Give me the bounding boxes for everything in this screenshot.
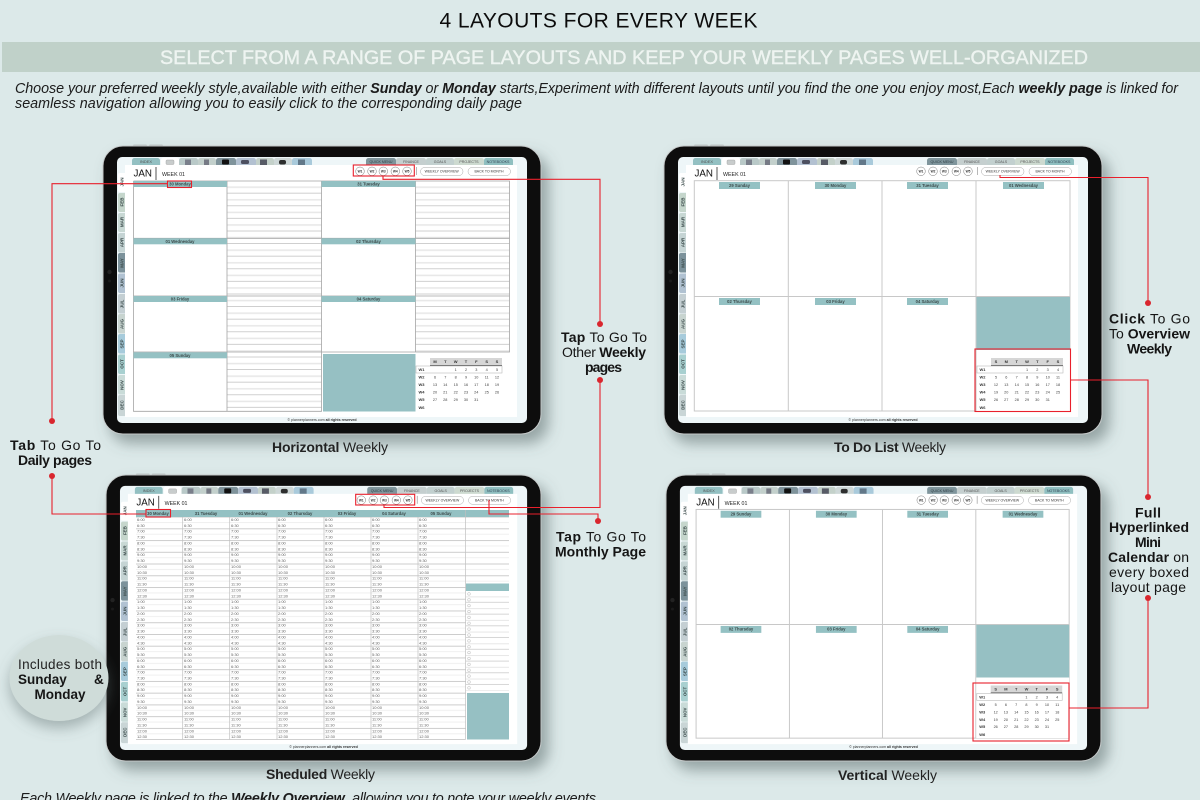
badge: includes both: & <box>94 672 104 687</box>
mini calendar: 4 <box>486 368 488 372</box>
horizontal weekly grid <box>134 181 510 412</box>
arrow: monthly page connector <box>489 500 601 524</box>
horizontal weekly grid: 02 Thursday <box>356 239 382 244</box>
mini calendar: F <box>475 359 478 364</box>
horizontal weekly grid: 04 Saturday <box>357 296 381 302</box>
schedule side column <box>466 510 509 740</box>
tablet: scheduled weekly <box>106 474 541 761</box>
mini calendar: 30 <box>464 398 468 402</box>
arrow: overview weekly connector <box>1000 175 1151 306</box>
mini calendar: 15 <box>454 383 458 387</box>
caption: vertical weekly: Vertical Weekly <box>838 767 937 783</box>
intro paragraph <box>15 81 1179 112</box>
callout: full hyperlinked mini calendar <box>1108 504 1189 595</box>
badge: includes both: Includes both <box>18 657 102 672</box>
badge: includes both: Sunday <box>18 672 67 687</box>
mini calendar: 9 <box>465 376 467 380</box>
mini calendar: 10 <box>474 376 478 380</box>
schedule table: 04 Saturday <box>382 511 407 516</box>
mini calendar: 20 <box>433 390 437 394</box>
callout: tap to go to other weekly pages: Tap To Go To <box>561 329 647 345</box>
caption: to do list weekly: To Do List Weekly <box>834 439 946 455</box>
mini calendar: 28 <box>443 398 447 402</box>
mini calendar: 14 <box>443 383 447 387</box>
callout: tab to go to daily pages <box>10 437 101 468</box>
arrow: daily pages bottom connector <box>49 473 170 517</box>
arrow: weekly tabs top connector <box>353 165 603 327</box>
badge: includes both: Monday <box>34 687 86 702</box>
subtitle band <box>2 42 1200 72</box>
mini calendar: 29 <box>454 398 458 402</box>
callout: full hyperlinked mini calendar: layout page <box>1111 579 1186 595</box>
caption: scheduled weekly: Sheduled Weekly <box>266 766 375 782</box>
intro paragraph: Choose your preferred weekly style,available with either Sunday or Monday starts,Experiment with different layouts until you find the one you enjoy most,Each weekly page is linked for <box>15 81 1179 97</box>
callout: full hyperlinked mini calendar: Mini <box>1135 534 1161 550</box>
callout: click to go to overview weekly: Weekly <box>1127 340 1172 356</box>
callout: tap to go to monthly page <box>555 528 646 560</box>
callout: full hyperlinked mini calendar: every boxed <box>1109 564 1189 580</box>
subtitle band: SELECT FROM A RANGE OF PAGE LAYOUTS AND KEEP YOUR WEEKLY PAGES WELL-ORGANIZED <box>160 47 1088 69</box>
mini calendar: 25 <box>485 390 489 394</box>
mini calendar: 18 <box>485 383 489 387</box>
mini calendar: S <box>496 359 499 364</box>
mini calendar: 22 <box>454 390 458 394</box>
mini calendar: 21 <box>443 390 447 394</box>
badge: includes both <box>10 635 108 721</box>
arrow: daily pages top connector <box>49 181 192 424</box>
schedule table: 02 Thursday <box>288 511 313 516</box>
callout: tap to go to monthly page: Monthly Page <box>555 544 646 560</box>
mini calendar: 26 <box>495 390 499 394</box>
mini calendar: 5 <box>496 368 498 372</box>
callout: tap to go to other weekly pages: Other Weekly <box>562 344 646 360</box>
schedule table: 05 Sunday <box>431 511 452 516</box>
mini calendar: T <box>465 359 468 364</box>
horizontal weekly grid: 05 Sunday <box>170 353 191 358</box>
mini calendar: 1 <box>455 368 457 372</box>
arrow: bottom mini calendar connector <box>973 595 1151 741</box>
horizontal weekly grid: 30 Monday <box>169 182 191 186</box>
mini calendar: 16 <box>464 383 468 387</box>
mini calendar: 19 <box>495 383 499 387</box>
callout: full hyperlinked mini calendar: Calendar on <box>1108 549 1189 565</box>
mini calendar: 27 <box>433 398 437 402</box>
callout: tab to go to daily pages: Tab To Go To <box>10 437 101 453</box>
callout: tap to go to monthly page: Tap To Go To <box>556 528 646 544</box>
mini calendar: 23 <box>464 390 468 394</box>
tablet: horizontal weekly <box>103 145 541 434</box>
mini calendar: 24 <box>474 390 478 394</box>
tablet: to do list weekly <box>664 145 1102 434</box>
mini calendar <box>416 358 502 410</box>
mini calendar: 12 <box>495 376 499 380</box>
schedule table: 03 Friday <box>338 511 357 516</box>
arrow: top mini calendar connector <box>975 349 1151 500</box>
tablet: vertical weekly <box>666 474 1101 761</box>
callout: tap to go to other weekly pages: pages <box>585 359 622 375</box>
mini calendar: T <box>444 359 447 364</box>
intro paragraph: seamless navigation allowing you to easily click to the corresponding daily page <box>15 96 522 112</box>
horizontal weekly grid: 03 Friday <box>171 296 190 302</box>
mini calendar: 7 <box>444 376 446 380</box>
callout: click to go to overview weekly <box>1109 310 1190 356</box>
mini calendar: M <box>433 359 437 364</box>
callout: click to go to overview weekly: Click To Go <box>1109 310 1190 326</box>
mini calendar: 11 <box>485 376 489 380</box>
callout: full hyperlinked mini calendar: Full <box>1135 504 1161 520</box>
schedule table: 31 Tuesday <box>195 511 218 516</box>
callout: tap to go to other weekly pages <box>561 329 647 375</box>
mini calendar: 13 <box>433 383 437 387</box>
schedule table: 30 Monday <box>147 511 169 516</box>
arrow: weekly tabs bottom connector <box>356 377 603 508</box>
horizontal weekly grid: 31 Tuesday <box>357 182 380 186</box>
mini calendar: 2 <box>465 368 467 372</box>
schedule table <box>136 510 466 740</box>
mini calendar: 6 <box>434 376 436 380</box>
title: 4 LAYOUTS FOR EVERY WEEK <box>440 10 758 32</box>
caption: horizontal weekly: Horizontal Weekly <box>272 439 388 455</box>
mini calendar: 17 <box>474 383 478 387</box>
mini calendar: 3 <box>475 368 477 372</box>
callout: tab to go to daily pages: Daily pages <box>18 452 92 468</box>
horizontal weekly grid: 01 Wednesday <box>165 239 195 244</box>
callout: click to go to overview weekly: To Overview <box>1109 326 1190 342</box>
mini calendar: 31 <box>474 398 478 402</box>
callout: full hyperlinked mini calendar: Hyperlinked <box>1109 519 1189 535</box>
mini calendar: S <box>485 359 488 364</box>
schedule table: 01 Wednesday <box>238 511 268 516</box>
mini calendar: W <box>454 359 458 364</box>
mini calendar: 8 <box>455 376 457 380</box>
